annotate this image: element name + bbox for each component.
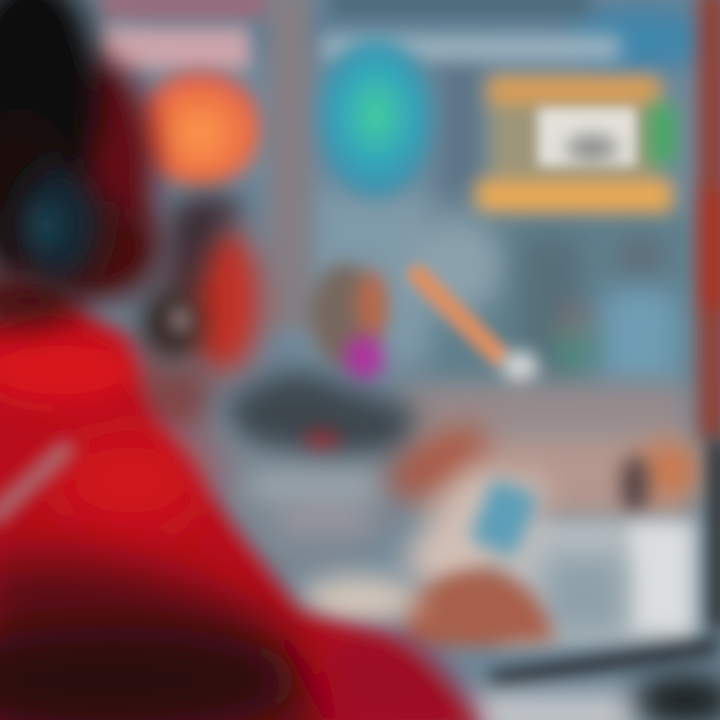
foreground figure bbox=[0, 0, 485, 720]
hoodie bright highlights bbox=[0, 336, 140, 404]
picture dark centre bbox=[566, 134, 618, 162]
green and red specks bbox=[557, 308, 593, 372]
hoodie bbox=[0, 300, 480, 720]
second figure headphones bbox=[140, 287, 204, 363]
right screen figure bbox=[520, 235, 680, 385]
front hand bbox=[300, 570, 555, 647]
maroon sleeve bbox=[320, 634, 485, 720]
hoodie dark folds bbox=[0, 556, 340, 720]
third figure bbox=[225, 263, 420, 470]
orange pen bbox=[418, 275, 538, 384]
teal headphones bbox=[18, 167, 102, 283]
grey pillar bbox=[268, 0, 312, 330]
bottom orange banner bbox=[476, 180, 672, 212]
lower desk bar bbox=[470, 645, 720, 720]
hood back bbox=[45, 60, 155, 280]
second figure face bbox=[182, 226, 262, 374]
grey sphere on screen bbox=[405, 215, 505, 315]
orange framed panel bbox=[476, 76, 676, 212]
white picture bbox=[538, 108, 636, 166]
third figure head bbox=[309, 263, 381, 367]
grey cord bbox=[0, 445, 70, 520]
second figure neck bbox=[135, 360, 215, 425]
second figure bbox=[135, 195, 262, 425]
lower right white sheet bbox=[500, 520, 695, 645]
light sleeve bbox=[400, 470, 550, 600]
head lower bbox=[30, 200, 160, 300]
magenta ear cup bbox=[344, 336, 384, 380]
third figure body bbox=[225, 371, 420, 470]
phone bbox=[468, 477, 540, 559]
striped grey jacket bbox=[170, 400, 400, 585]
second figure hair bbox=[170, 195, 248, 300]
hair bbox=[0, 0, 100, 210]
pen white tip bbox=[502, 352, 538, 384]
green panel bbox=[648, 104, 676, 164]
desk band bbox=[400, 385, 702, 520]
top banner strip bbox=[100, 0, 620, 70]
top orange banner bbox=[488, 76, 660, 104]
panel backing bbox=[490, 95, 660, 185]
orange circle bbox=[138, 70, 262, 186]
right frame edge bbox=[698, 0, 720, 630]
reaching hand bbox=[385, 425, 490, 505]
globe bbox=[318, 38, 434, 198]
